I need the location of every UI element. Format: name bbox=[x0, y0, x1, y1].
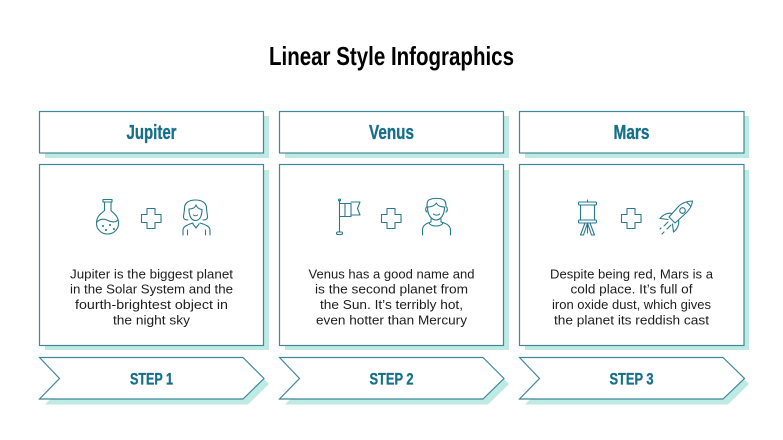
text: Venus description: Venus has a good name and bbox=[308, 268, 475, 282]
text: Venus description: is the second planet from bbox=[315, 282, 468, 296]
heading: Mars: Mars bbox=[614, 122, 650, 144]
panel: Mars card bbox=[520, 164, 749, 350]
heading: Mars bbox=[520, 112, 749, 158]
text: Mars description: iron oxide dust, which gives bbox=[552, 298, 711, 312]
arrow: step 3 bbox=[520, 358, 749, 404]
arrow: step 2 bbox=[280, 358, 509, 404]
text: Jupiter description bbox=[70, 268, 234, 328]
icon: plus bbox=[382, 208, 401, 228]
text: Venus description: even hotter than Mercury bbox=[316, 314, 468, 328]
title: Linear Style Infographics bbox=[269, 41, 514, 71]
arrow: step 1 bbox=[40, 358, 269, 404]
panel: Venus card bbox=[280, 164, 509, 350]
text: Jupiter description: the night sky bbox=[113, 314, 191, 328]
icon: woman bbox=[183, 200, 210, 235]
icon: plus bbox=[142, 208, 161, 228]
arrow: step 3: STEP 3 bbox=[610, 370, 654, 388]
text: Mars description: the planet its reddish cast bbox=[554, 314, 710, 328]
icon: flag bbox=[336, 199, 360, 234]
arrow: step 2: STEP 2 bbox=[370, 370, 414, 388]
text: Mars description bbox=[550, 268, 713, 328]
heading: Jupiter bbox=[40, 112, 269, 158]
panel: Venus column bbox=[280, 112, 509, 404]
text: Venus description: the Sun. It’s terribly hot, bbox=[320, 298, 463, 312]
heading: Venus bbox=[280, 112, 509, 158]
text: Venus description bbox=[308, 268, 475, 328]
icon: rocket bbox=[660, 201, 692, 234]
icon: presentation board bbox=[578, 200, 596, 235]
heading: Venus: Venus bbox=[369, 122, 414, 144]
text: Mars description: cold place. It’s full of bbox=[570, 282, 693, 296]
text: Jupiter description: in the Solar System and the bbox=[70, 282, 233, 296]
icon: man bbox=[422, 198, 450, 235]
icon: flask bbox=[96, 200, 118, 234]
text: Mars description: Despite being red, Mars is a bbox=[550, 268, 713, 282]
panel: Jupiter column bbox=[40, 112, 269, 404]
text: Jupiter description: Jupiter is the biggest planet bbox=[70, 268, 234, 282]
panel: Jupiter card bbox=[40, 164, 269, 350]
text: Jupiter description: fourth-brightest object in bbox=[75, 298, 228, 312]
arrow: step 1: STEP 1 bbox=[130, 370, 173, 388]
heading: Jupiter: Jupiter bbox=[126, 122, 177, 144]
icon: plus bbox=[622, 208, 641, 228]
panel: Mars column bbox=[520, 112, 749, 404]
